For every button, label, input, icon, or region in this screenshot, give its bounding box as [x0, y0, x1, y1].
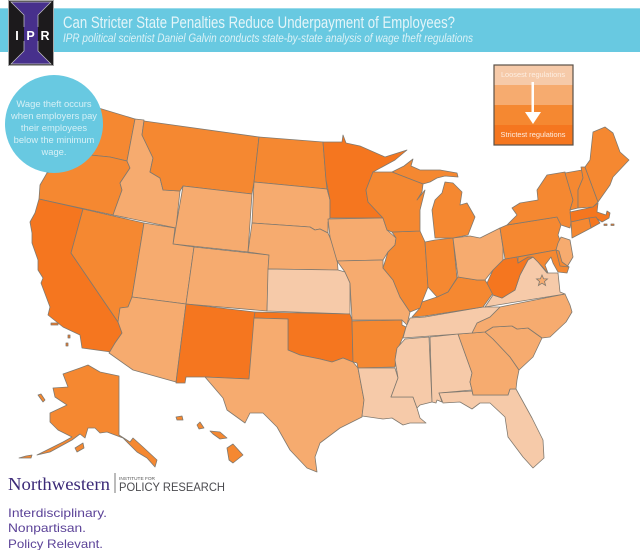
state: Oregon — [39, 155, 130, 215]
state: New York — [507, 172, 573, 228]
state: Florida — [439, 389, 544, 468]
icon: capital star — [536, 275, 548, 286]
callout: wage theft definition: below the minimum — [14, 134, 95, 145]
state: Tennessee — [403, 307, 500, 338]
state: Nevada — [71, 209, 144, 322]
Northwestern IPR wordmark: Northwestern — [8, 474, 110, 494]
state: Texas — [205, 318, 364, 472]
IPR logo: R — [40, 29, 50, 43]
callout: wage theft definition: their employees — [21, 122, 87, 133]
state: Hawaii Maui — [210, 431, 227, 439]
legend: regulation strictness — [494, 65, 573, 145]
state: Michigan upper peninsula — [392, 159, 458, 184]
state: Ohio — [453, 228, 503, 280]
state: Massachusetts — [570, 203, 610, 222]
Northwestern IPR wordmark — [8, 473, 225, 494]
state: New Mexico — [176, 304, 255, 383]
state: South Dakota — [252, 182, 330, 233]
state: Kansas — [267, 269, 350, 314]
state: Arkansas — [352, 320, 406, 368]
state: Alabama — [430, 334, 472, 403]
state: South Carolina — [485, 326, 542, 370]
callout: wage theft definition — [5, 75, 103, 173]
island: Aleutian — [19, 455, 32, 458]
state: Pennsylvania — [500, 217, 561, 259]
title: Can Stricter State Penalties Reduce Underpayment of Employees? — [63, 13, 455, 32]
state: Delaware — [556, 250, 569, 267]
header banner — [0, 8, 640, 52]
state: Arizona — [109, 297, 186, 382]
state: California — [30, 199, 122, 352]
Northwestern IPR wordmark: INSTITUTE FOR — [119, 476, 155, 481]
state: Mississippi — [391, 337, 432, 408]
callout: wage theft definition: wage. — [40, 146, 67, 157]
state: Iowa — [328, 218, 396, 261]
state: Montana — [142, 121, 259, 194]
state: Oklahoma — [254, 312, 353, 362]
state: Maryland — [518, 250, 569, 273]
state: Illinois — [383, 231, 428, 312]
state: Louisiana — [358, 368, 426, 425]
legend top label: Loosest regulations — [501, 70, 565, 79]
state: Rhode Island — [589, 217, 600, 228]
legend bottom label: Strictest regulations — [501, 130, 566, 139]
state: Connecticut — [571, 218, 591, 238]
icon: Massachusetts islands — [604, 224, 614, 226]
state: Colorado — [186, 247, 269, 311]
state: Wyoming — [173, 186, 252, 252]
state: Hawaii Oahu — [197, 422, 204, 429]
state: Virginia — [485, 257, 565, 307]
tagline: Interdisciplinary. — [8, 506, 107, 520]
tagline — [8, 506, 107, 550]
map of US states — [19, 100, 629, 472]
state: Wisconsin — [366, 172, 425, 232]
state: Maine — [585, 127, 629, 202]
state: Hawaii Kauai — [176, 416, 183, 420]
state: Missouri — [337, 260, 410, 325]
callout: wage theft definition: Wage theft occurs — [16, 98, 92, 109]
Northwestern IPR wordmark: POLICY RESEARCH — [119, 480, 225, 494]
state: Minnesota — [323, 135, 407, 218]
state: Utah — [132, 223, 194, 304]
state: Alaska — [37, 365, 157, 467]
state: New Hampshire — [578, 167, 598, 208]
state: New Jersey — [556, 237, 573, 267]
state: North Dakota — [254, 137, 327, 189]
tagline: Nonpartisan. — [8, 521, 86, 535]
state: West Virginia — [487, 257, 533, 298]
IPR logo: P — [26, 29, 35, 43]
state: Nebraska — [248, 223, 338, 270]
state: Kentucky — [412, 277, 493, 317]
subtitle: IPR political scientist Daniel Galvin conducts state-by-state analysis of wage theft regulations — [63, 33, 473, 45]
state: Vermont — [565, 170, 583, 210]
callout: wage theft definition: when employers pay — [10, 110, 97, 121]
state: Michigan lower peninsula — [432, 182, 475, 238]
arrow: loosest to strictest — [525, 82, 541, 124]
state: Georgia — [458, 332, 519, 395]
icon: Channel Islands — [51, 323, 70, 346]
state: North Carolina — [472, 294, 572, 338]
state: Washington — [45, 100, 135, 173]
state: Idaho — [113, 119, 180, 228]
island: Kodiak — [75, 443, 84, 452]
IPR logo — [8, 0, 54, 66]
island: St Lawrence — [38, 394, 45, 402]
IPR logo: I — [15, 29, 19, 43]
state: Indiana — [425, 238, 457, 297]
state: Hawaii main island — [227, 444, 243, 463]
